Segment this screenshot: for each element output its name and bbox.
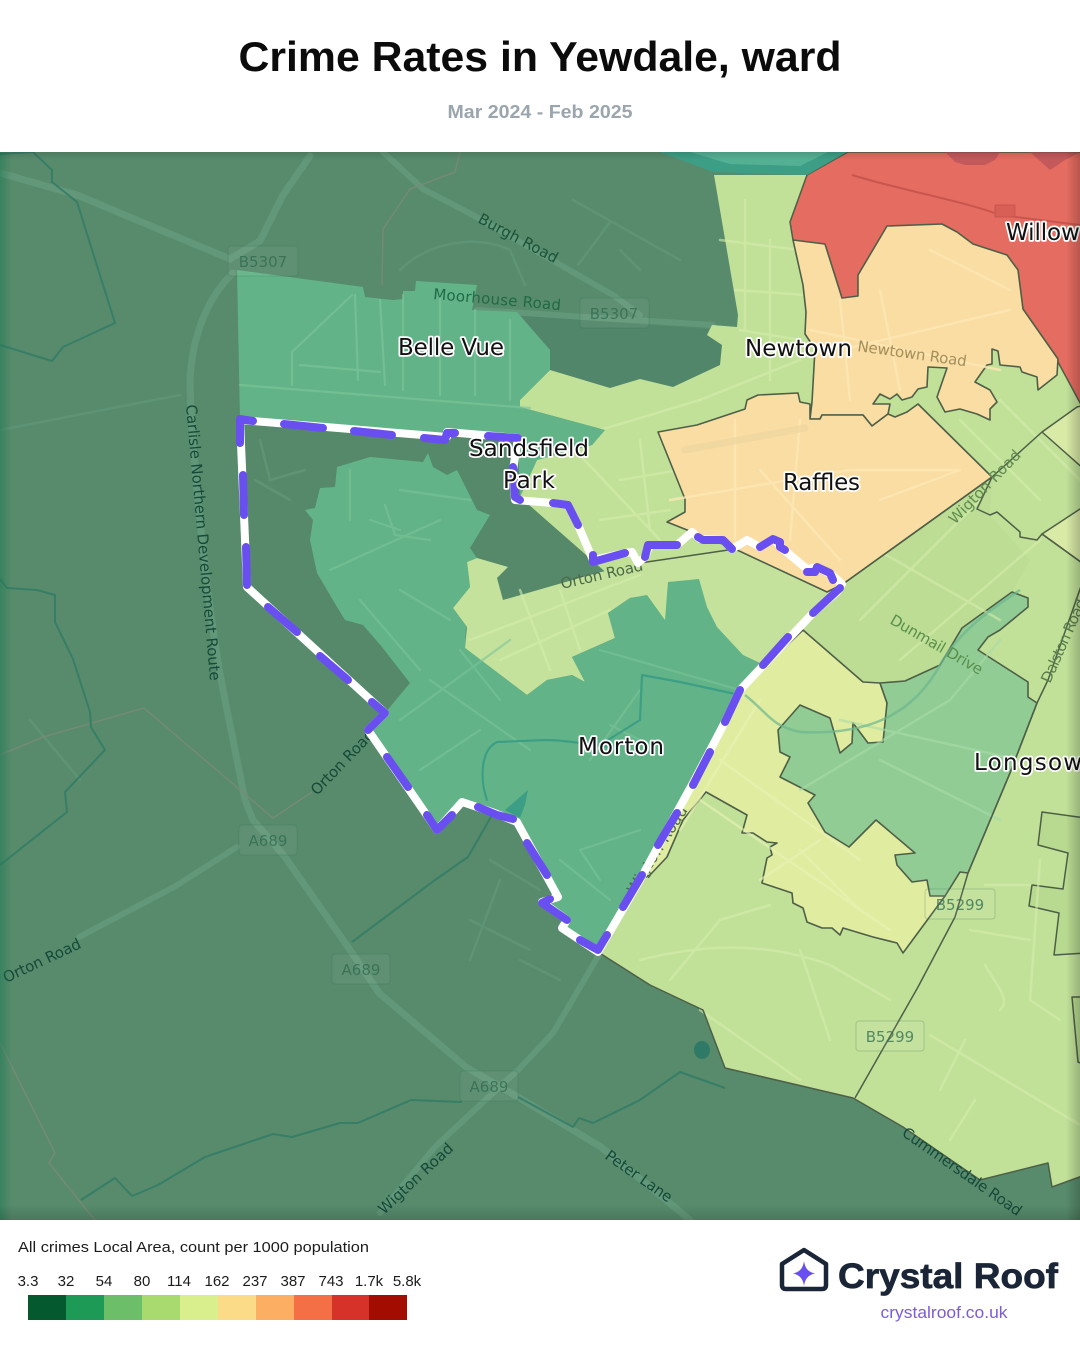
faint grey parish boundaries: [0, 152, 460, 1220]
road labels: Wigton Road: [945, 446, 1025, 528]
legend: value labels: 54: [96, 1273, 112, 1290]
road shields: A689: [342, 961, 380, 979]
road labels: Dunmail Drive: [887, 611, 986, 678]
area: right pale cells: [1042, 405, 1080, 565]
Belle Vue roads: [240, 295, 530, 408]
area: dark green inside ward: [240, 420, 597, 713]
legend: value labels: 1.7k: [355, 1273, 384, 1290]
area: north-east green shading: [803, 477, 1030, 682]
legend: colour scale: [28, 1295, 407, 1320]
road labels: Cummersdale Road: [899, 1124, 1025, 1220]
area: darker green cells lower right: [1029, 812, 1080, 1065]
area: pale yellow ward: [640, 630, 945, 953]
road labels: Peter Lane: [602, 1147, 676, 1206]
road labels: Burgh Road: [475, 210, 561, 267]
road shields: B5307: [239, 253, 287, 271]
road labels: [0, 210, 1080, 1220]
area: Belle Vue ward: [237, 270, 605, 497]
thin boundary streams: [0, 152, 725, 1200]
legend: value labels: 32: [58, 1273, 74, 1290]
road labels: Wigton Road: [623, 803, 691, 897]
logo: Crystal Roof house icon: [782, 1250, 826, 1289]
Morton roads and stream: [400, 640, 740, 900]
legend: value labels: 387: [280, 1273, 306, 1290]
inner ward roads: [330, 470, 470, 670]
area: peach ward Raffles: [658, 393, 992, 592]
legend: value labels: [18, 1273, 422, 1290]
place labels: Newtown: [745, 336, 852, 362]
background roads in dark area: [0, 152, 713, 1220]
place labels: Belle Vue: [398, 335, 504, 361]
legend: value labels: 237: [242, 1273, 268, 1290]
selected ward outline: Yewdale: [240, 419, 842, 952]
title: Crime Rates in Yewdale, ward: [238, 33, 842, 80]
road labels: Orton Road: [559, 556, 645, 593]
legend title: All crimes Local Area, count per 1000 population: [18, 1239, 369, 1256]
road shields: [228, 246, 995, 1101]
roads in east wards: [470, 200, 1080, 1140]
place labels: Park: [503, 468, 556, 494]
map edge shading: [0, 152, 1080, 1220]
road shields: A689: [249, 832, 287, 850]
legend: value labels: 162: [204, 1273, 230, 1290]
road labels: Orton Road: [307, 726, 378, 799]
area: peach ward Newtown: [793, 224, 1058, 426]
place labels: Sandsfield: [469, 436, 589, 462]
red ward details: [852, 152, 1080, 225]
road labels: Carlisle Northern Development Route: [182, 404, 224, 681]
place labels: Morton: [578, 734, 664, 760]
ward boundary outlines: [598, 432, 1080, 1187]
area: light green wards (east): [520, 160, 1080, 1187]
legend: value labels: 80: [134, 1273, 150, 1290]
dark water spot: [694, 1041, 710, 1059]
purple dashes: [240, 419, 840, 950]
website link: crystalroof.co.uk: [880, 1304, 1008, 1322]
white base line: [240, 420, 842, 952]
road shields: B5299: [866, 1028, 914, 1046]
area: light green central band: [453, 558, 634, 695]
logo wordmark: Crystal Roof: [838, 1257, 1058, 1296]
legend: value labels: 743: [318, 1273, 344, 1290]
area: Morton ward: [368, 579, 760, 952]
peach ward roads: [670, 250, 1010, 560]
legend: value labels: 3.3: [18, 1273, 38, 1290]
road shields: A689: [470, 1078, 508, 1096]
place labels: [398, 220, 1080, 776]
legend: value labels: 5.8k: [393, 1273, 422, 1290]
subtitle: date range: Mar 2024 - Feb 2025: [448, 101, 632, 122]
road labels: Wigton Road: [374, 1139, 457, 1218]
area: inner ward green: [305, 453, 490, 683]
road shields: B5299: [936, 896, 984, 914]
road labels: Newtown Road: [856, 337, 968, 370]
legend: value labels: 114: [167, 1273, 191, 1290]
stream through Longsowerby: [745, 590, 1020, 732]
area: darker patch north: [517, 312, 722, 388]
choropleth map: [0, 152, 1080, 1220]
road shields: B5307: [590, 305, 638, 323]
road labels: Moorhouse Road: [433, 285, 562, 314]
area: red high-crime ward: [790, 152, 1080, 412]
river at top: [660, 152, 847, 175]
area: medium green ward: [778, 592, 1037, 896]
road labels: Orton Road: [0, 935, 84, 987]
place labels: Raffles: [783, 470, 860, 496]
